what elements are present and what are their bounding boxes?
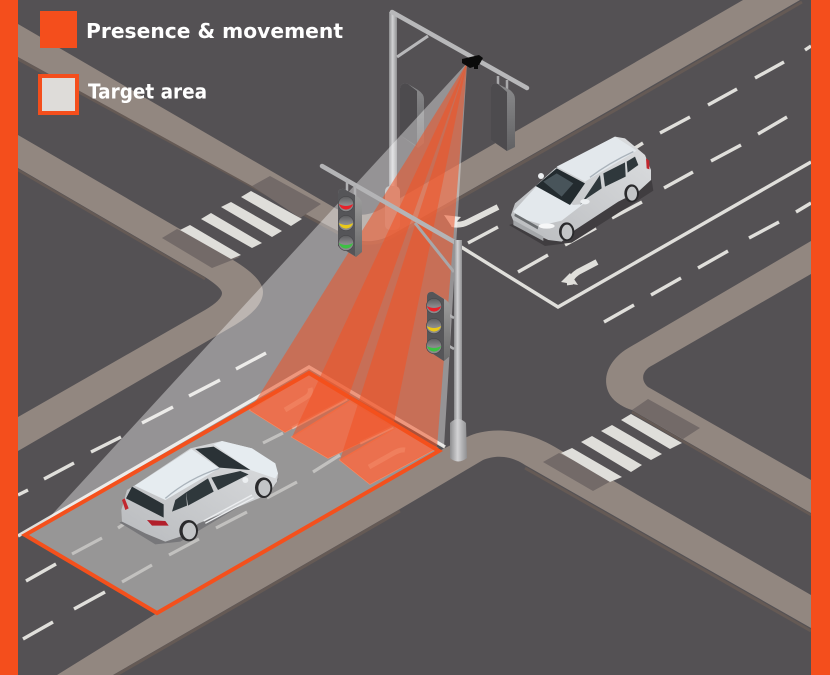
- side band: left: [0, 0, 18, 675]
- traffic light: upper: [338, 180, 362, 257]
- legend: presence and movement: [40, 11, 343, 48]
- sensor field of view: [47, 63, 467, 520]
- near pole and arm: [322, 166, 467, 462]
- sidewalk: top corner: [18, 0, 802, 243]
- crosswalk: lower right: [561, 414, 682, 482]
- crosswalk: upper left: [180, 191, 302, 259]
- legend: target area: Target area: [88, 80, 207, 104]
- camera: [462, 55, 483, 69]
- far pole and signals: [385, 12, 527, 230]
- road arrows: [444, 207, 597, 285]
- legend: presence and movement: Presence & movement: [86, 19, 343, 43]
- sidewalk: right corner: [606, 241, 811, 515]
- sidewalk: left corner: [18, 135, 263, 451]
- legend: target area: [40, 76, 207, 113]
- presence beams: [250, 63, 467, 484]
- presence zones: [250, 373, 437, 484]
- target area outline: [25, 373, 439, 613]
- traffic light: lower: [426, 292, 454, 361]
- target area: [25, 373, 439, 613]
- car: upper right: [509, 137, 653, 246]
- side band: right: [811, 0, 830, 675]
- car: in target area: [119, 441, 279, 544]
- lane marks inside zones: [285, 388, 405, 467]
- sidewalk: bottom corner: [57, 430, 811, 675]
